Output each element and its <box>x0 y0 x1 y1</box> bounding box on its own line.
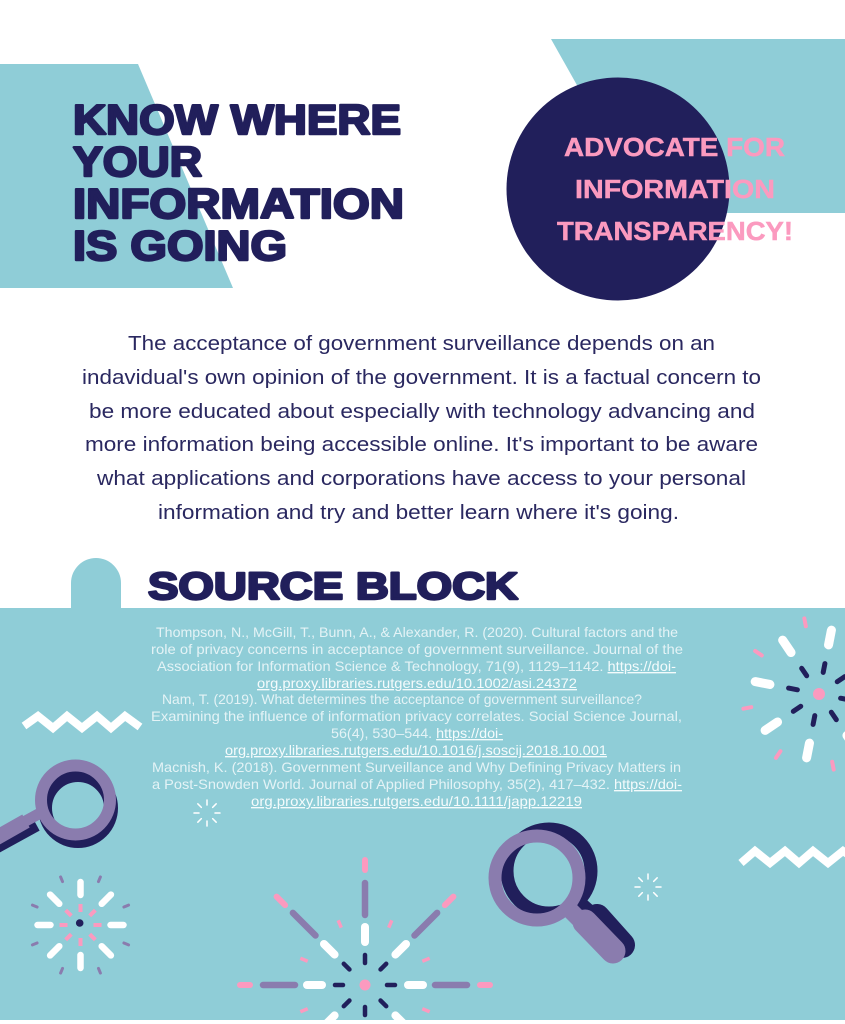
text block: references <box>151 625 683 809</box>
callout: advocate for information transparency: TRANSPARENCY! <box>557 216 793 246</box>
callout: advocate for information transparency: ADVOCATE FOR <box>564 132 785 162</box>
text block: body paragraph: what applications and corporations have access to your personal <box>96 468 746 490</box>
icon: left magnifying glass <box>0 766 111 846</box>
title: INFORMATION <box>73 180 404 227</box>
text block: references: Examining the influence of information privacy correlates. Social Science Journal, <box>151 709 682 724</box>
text block: body paragraph <box>82 333 761 524</box>
text block: references: org.proxy.libraries.rutgers.edu/10.1016/j.soscij.2018.10.001 <box>225 743 607 758</box>
icon: right zigzag <box>741 851 845 863</box>
text block: references: a Post-Snowden World. Journal of Applied Philosophy, 35(2), 417–432. https://doi- <box>152 777 682 792</box>
text block: body paragraph: more information being accessible online. It's important to be aware <box>85 434 758 456</box>
panel: title background shape <box>0 64 233 288</box>
title: IS GOING <box>73 222 287 269</box>
panel: top right background shape <box>551 39 845 213</box>
text block: references: role of privacy concerns in acceptance of government surveillance. Journal of the <box>151 642 683 657</box>
panel: source block tab <box>71 558 121 609</box>
title: YOUR <box>73 138 202 185</box>
text block: body paragraph: information and try and better learn where it's going. <box>158 502 679 524</box>
text block: references: Association for Information Science & Technology, 71(9), 1129–1142. https://doi- <box>157 659 676 674</box>
icon: small sparkle left <box>194 800 220 826</box>
text block: references: Macnish, K. (2018). Government Surveillance and Why Defining Privacy Matters in <box>152 760 681 775</box>
icon: top right firework <box>743 618 845 770</box>
callout: advocate for information transparency <box>557 132 793 246</box>
icon: small sparkle right <box>635 874 661 900</box>
text block: references: org.proxy.libraries.rutgers.edu/10.1111/japp.12219 <box>251 794 582 809</box>
icon: big bottom firework <box>240 860 490 1024</box>
text block: body paragraph: be more educated about especially with technology advancing and <box>89 401 755 423</box>
title: KNOW WHERE <box>73 96 401 143</box>
text block: body paragraph: The acceptance of government surveillance depends on an <box>128 333 715 355</box>
text block: references: Nam, T. (2019). What determines the acceptance of government surveillance? <box>162 692 642 707</box>
text block: references: Thompson, N., McGill, T., Bunn, A., & Alexander, R. (2020). Cultural factors and the <box>156 625 678 640</box>
panel: navy circle <box>506 78 730 300</box>
panel: source block background <box>0 608 845 1020</box>
text block: references: 56(4), 530–544. https://doi- <box>331 726 503 741</box>
title <box>73 96 404 269</box>
callout: advocate for information transparency: INFORMATION <box>575 174 775 204</box>
text block: references: org.proxy.libraries.rutgers.edu/10.1002/asi.24372 <box>257 676 577 691</box>
text block: body paragraph: indavidual's own opinion of the government. It is a factual concern to <box>82 367 761 389</box>
icon: left zigzag <box>24 716 140 728</box>
icon: right magnifying glass <box>495 829 622 951</box>
icon: lower left firework <box>32 877 129 973</box>
heading: source block: SOURCE BLOCK <box>148 566 519 608</box>
